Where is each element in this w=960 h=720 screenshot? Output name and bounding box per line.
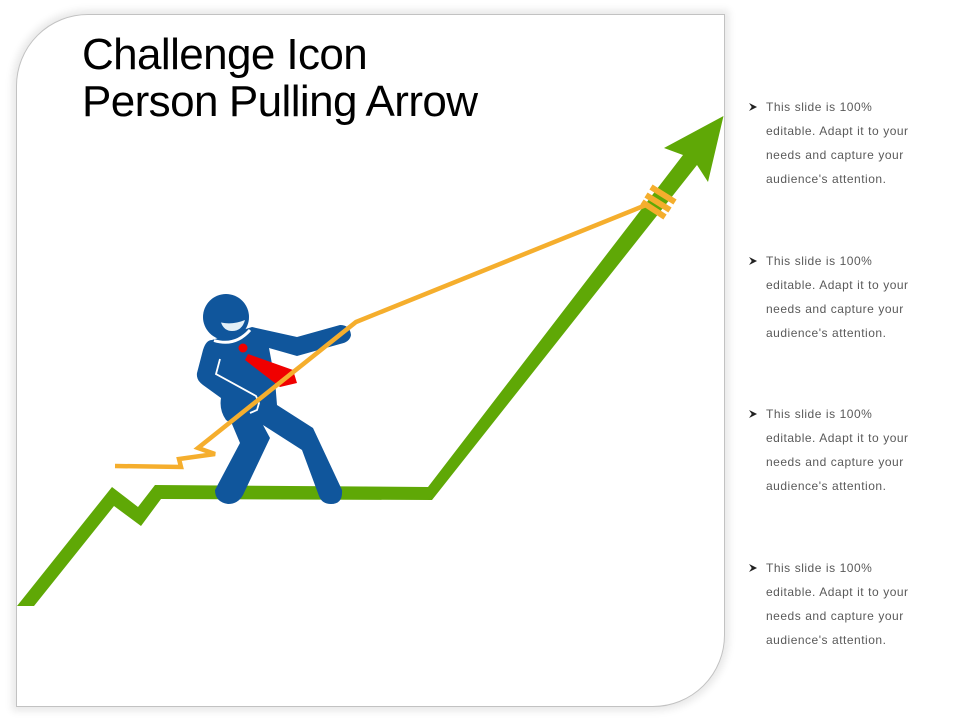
text block: bullet 1 [749,100,909,186]
title: Challenge Icon [82,30,367,79]
text block: bullet 1: This slide is 100% [766,100,872,114]
text block: bullet 3: needs and capture your [766,455,904,469]
title [82,30,478,126]
text block: bullet 2 [749,254,909,340]
text block: bullet 4: This slide is 100% [766,561,872,575]
text block: bullet 4 [749,561,909,647]
text block: bullet 2: This slide is 100% [766,254,872,268]
title: Person Pulling Arrow [82,77,477,126]
person head [203,294,249,340]
text block: bullet 3: audience's attention. [766,479,886,493]
text block: bullet 2: audience's attention. [766,326,886,340]
text block: bullet 4: needs and capture your [766,609,904,623]
text block: bullet 4: audience's attention. [766,633,886,647]
red tie knot [238,344,248,352]
arm outline [216,359,259,413]
text block: bullet 3 [749,407,909,493]
person smile [221,320,245,331]
person torso and legs [197,325,351,504]
text block: bullet 2: needs and capture your [766,302,904,316]
icon: person pulling [197,294,351,504]
text block: bullet 2: editable. Adapt it to your [766,278,909,292]
icon: green rising arrow [17,116,724,606]
text block: bullet 1: needs and capture your [766,148,904,162]
panel: rounded frame [16,14,725,707]
icon: rope knot [642,187,675,217]
text block: bullet 1: editable. Adapt it to your [766,124,909,138]
head gap [214,330,250,342]
text block: bullet 1: audience's attention. [766,172,886,186]
red tie [245,354,297,387]
text block: bullet 4: editable. Adapt it to your [766,585,909,599]
icon: orange rope [115,205,646,467]
text block: bullet 3: editable. Adapt it to your [766,431,909,445]
text block: bullet 3: This slide is 100% [766,407,872,421]
